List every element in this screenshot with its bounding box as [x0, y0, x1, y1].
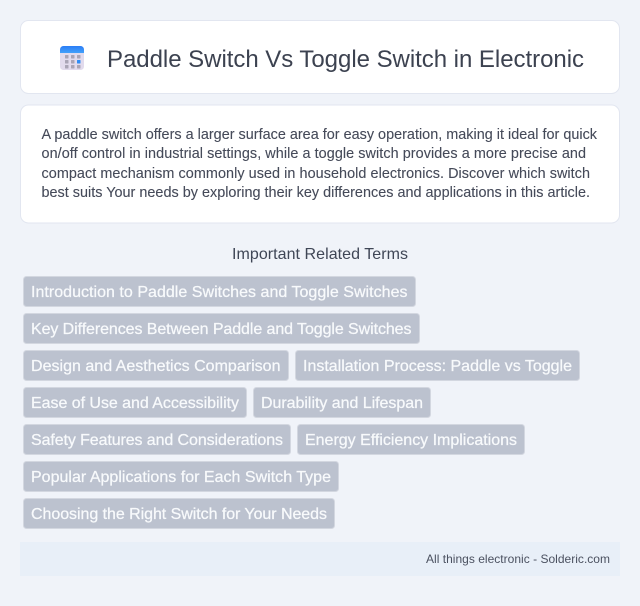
chip: applications: Popular Applications for Each Switch Type	[31, 469, 331, 486]
chip: introduction: Introduction to Paddle Switches and Toggle Switches	[31, 284, 408, 301]
footer	[20, 542, 620, 576]
text block: intro line 3: compact mechanism commonly used in household electronics. Discover which switch	[42, 166, 590, 182]
chip: safety	[24, 424, 290, 454]
chip: introduction	[24, 276, 416, 306]
chip: installation: Installation Process: Paddle vs Toggle	[303, 358, 572, 375]
panel: introduction	[20, 105, 620, 223]
chip: durability: Durability and Lifespan	[261, 395, 423, 412]
chip: choosing	[24, 498, 334, 528]
icon: calendar	[60, 46, 84, 70]
text block: intro line 1: A paddle switch offers a larger surface area for easy operation, making it ideal for quick	[42, 127, 598, 143]
chip: durability	[254, 388, 430, 418]
chip: ease of use: Ease of Use and Accessibility	[31, 395, 239, 412]
title: Paddle Switch Vs Toggle Switch in Electronic	[107, 46, 584, 73]
panel: title header	[20, 20, 620, 94]
chip: key differences: Key Differences Between Paddle and Toggle Switches	[31, 321, 412, 338]
chip: energy: Energy Efficiency Implications	[305, 432, 517, 449]
chip: safety: Safety Features and Considerations	[31, 432, 283, 449]
chip: design	[24, 350, 288, 380]
chip: design: Design and Aesthetics Comparison	[31, 358, 280, 375]
chip: key differences	[24, 314, 420, 344]
chip: choosing: Choosing the Right Switch for Your Needs	[31, 506, 327, 523]
text block: intro line 2: on/off control in industrial settings, while a toggle switch provides a more precise and	[42, 146, 586, 162]
text block: intro line 4: best suits Your needs by exploring their key differences and applications in this article.	[42, 185, 590, 201]
footer credit: All things electronic - Solderic.com	[426, 552, 610, 566]
chip: installation	[296, 350, 580, 380]
chip: applications	[24, 462, 338, 492]
chip: ease of use	[24, 388, 246, 418]
chip: energy	[298, 424, 524, 454]
heading: related terms: Important Related Terms	[232, 246, 408, 263]
